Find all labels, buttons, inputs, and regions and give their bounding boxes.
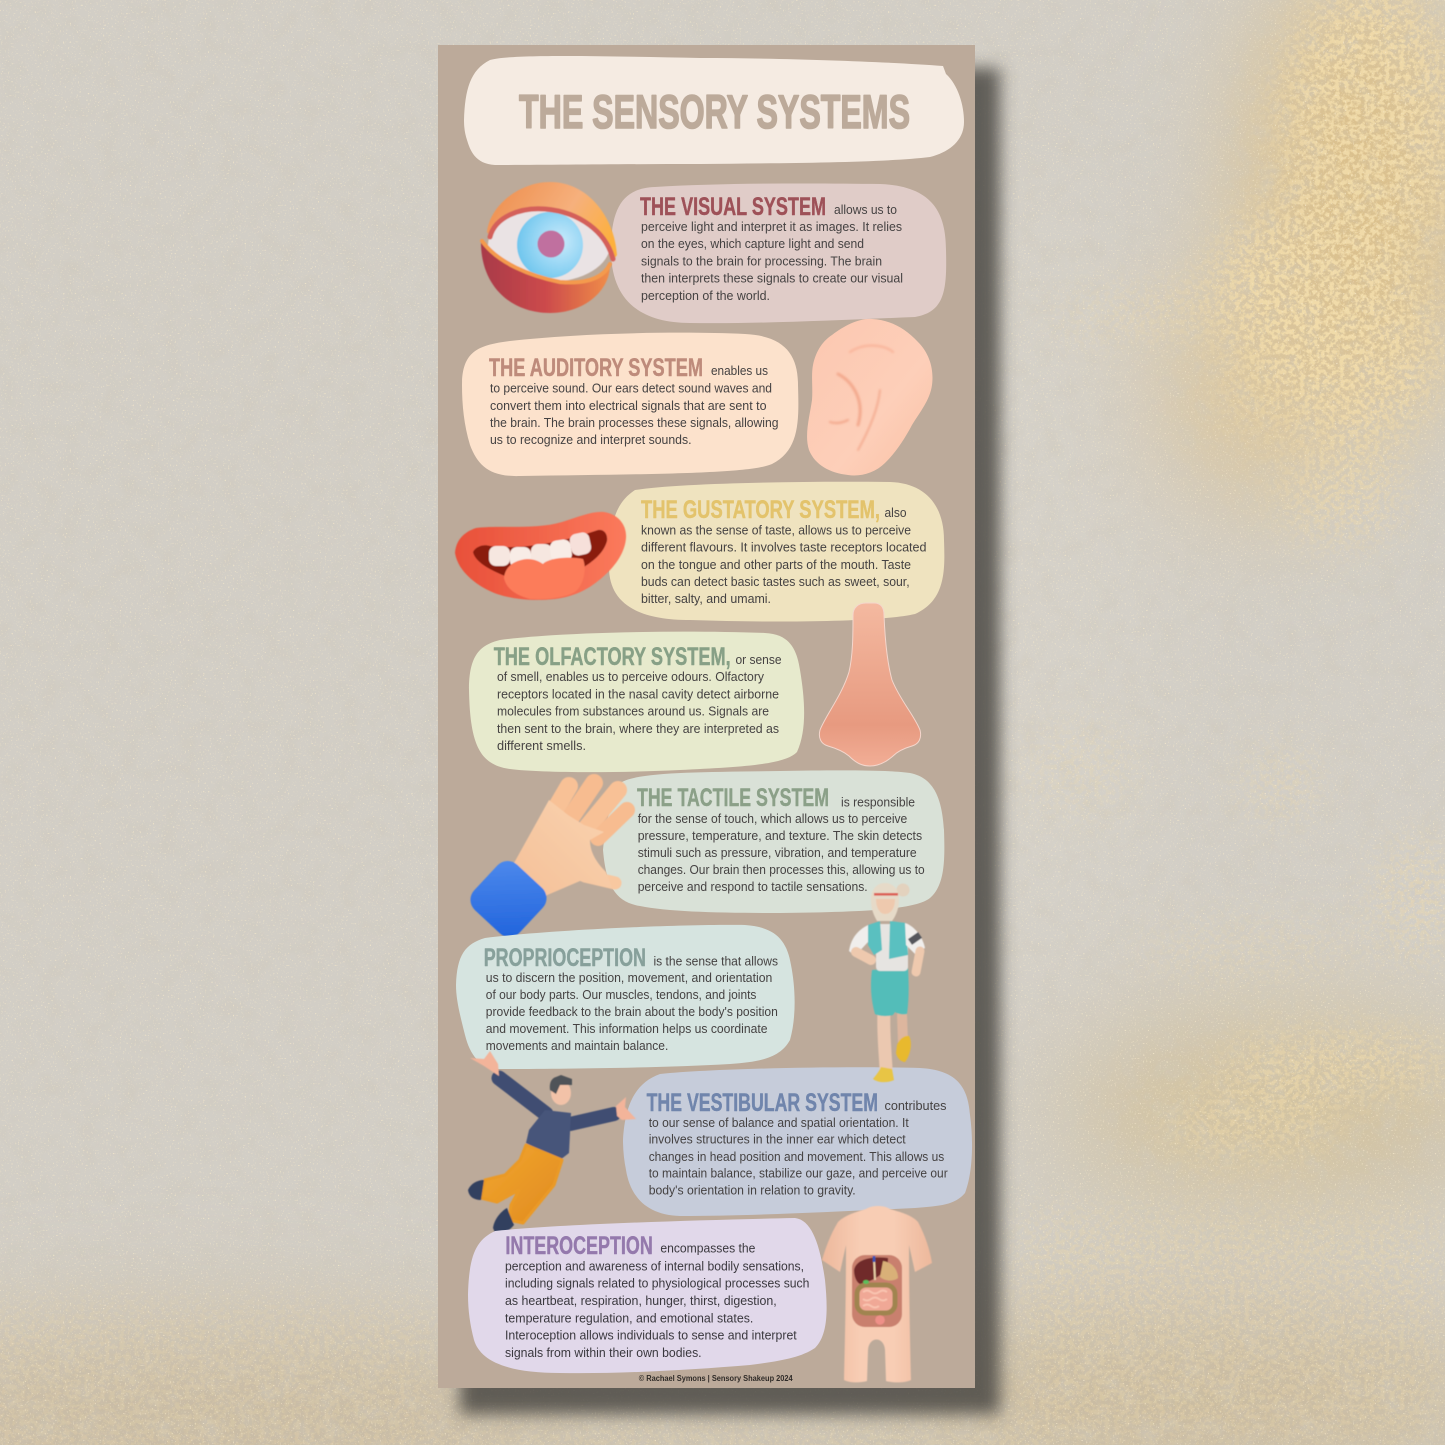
body text: and movement. This information helps us coordinate <box>486 1022 768 1036</box>
body text: us to discern the position, movement, and orientation <box>486 971 772 985</box>
body text: or sense <box>736 653 782 667</box>
body text: convert them into electrical signals that are sent to <box>490 399 766 413</box>
icon: eye <box>481 182 617 313</box>
body text: to maintain balance, stabilize our gaze, and perceive our <box>649 1167 948 1181</box>
body text: perceive light and interpret it as images. It relies <box>641 220 902 234</box>
body text: receptors located in the nasal cavity detect airborne <box>497 688 779 702</box>
body text: different flavours. It involves taste receptors located <box>641 540 926 554</box>
body text <box>490 364 778 447</box>
body text: movements and maintain balance. <box>486 1039 668 1053</box>
body text: Interoception allows individuals to sense and interpret <box>505 1329 797 1343</box>
body text: signals to the brain for processing. The brain <box>641 254 882 268</box>
body text <box>505 1242 809 1360</box>
body text: different smells. <box>497 739 586 753</box>
body text: the brain. The brain processes these signals, allowing <box>490 416 778 430</box>
body text: buds can detect basic tastes such as sweet, sour, <box>641 575 910 589</box>
body text: perceive and respond to tactile sensations. <box>638 880 868 894</box>
body text: enables us <box>711 364 768 378</box>
body text: signals from within their own bodies. <box>505 1346 702 1360</box>
body text: allows us to <box>834 203 897 217</box>
body text: contributes <box>884 1099 946 1113</box>
panel: proprioception <box>456 925 795 1069</box>
body text: bitter, salty, and umami. <box>641 592 771 606</box>
body text: for the sense of touch, which allows us to perceive <box>638 812 907 826</box>
body text: then sent to the brain, where they are interpreted as <box>497 722 779 736</box>
body text: on the tongue and other parts of the mouth. Taste <box>641 558 911 572</box>
body text: to perceive sound. Our ears detect sound waves and <box>490 382 772 396</box>
body text: molecules from substances around us. Signals are <box>497 705 769 719</box>
heading: THE AUDITORY SYSTEM <box>489 354 703 382</box>
body text: of our body parts. Our muscles, tendons, and joints <box>486 988 756 1002</box>
body text: then interprets these signals to create our visual <box>641 272 903 286</box>
heading: THE OLFACTORY SYSTEM, <box>494 643 731 671</box>
body text <box>486 954 778 1053</box>
body text: as heartbeat, respiration, hunger, thirst, digestion, <box>505 1294 777 1308</box>
body text: changes. Our brain then processes this, allowing us to <box>638 863 925 877</box>
heading: THE TACTILE SYSTEM <box>637 784 829 812</box>
copyright credit: © Rachael Symons | Sensory Shakeup 2024 <box>639 1374 793 1383</box>
panel: olfactory system <box>469 632 804 772</box>
body text: is the sense that allows <box>654 954 778 968</box>
main poster panel <box>438 45 975 1388</box>
body text <box>497 653 782 753</box>
body text <box>641 203 903 303</box>
body text: perception of the world. <box>641 289 770 303</box>
heading: THE VESTIBULAR SYSTEM <box>647 1089 878 1117</box>
body text: perception and awareness of internal bodily sensations, <box>505 1259 804 1273</box>
body text: also <box>884 506 906 520</box>
body text: on the eyes, which capture light and send <box>641 237 864 251</box>
panel: tactile system <box>603 770 944 913</box>
icon: ear <box>807 319 932 476</box>
icon: nose <box>819 603 921 766</box>
body text: encompasses the <box>660 1242 755 1256</box>
icon: mouth <box>455 512 626 600</box>
body text <box>641 506 926 606</box>
panel: gustatory system <box>609 482 944 622</box>
heading: INTEROCEPTION <box>505 1232 653 1260</box>
body text: provide feedback to the brain about the body's position <box>486 1005 778 1019</box>
body text: pressure, temperature, and texture. The skin detects <box>638 829 922 843</box>
icon: hand <box>465 783 627 943</box>
icon: floating man <box>468 1051 636 1235</box>
body text: including signals related to physiological processes such <box>505 1277 809 1291</box>
body text: is responsible <box>841 795 915 809</box>
body text: of smell, enables us to perceive odours. Olfactory <box>497 670 765 684</box>
body text: us to recognize and interpret sounds. <box>490 433 692 447</box>
panel: visual system <box>611 183 946 323</box>
heading: THE VISUAL SYSTEM <box>640 193 826 221</box>
panel: interoception <box>468 1218 827 1373</box>
heading: PROPRIOCEPTION <box>484 944 646 972</box>
title: THE SENSORY SYSTEMS <box>519 85 910 138</box>
panel: vestibular system <box>623 1067 972 1216</box>
title banner <box>464 56 964 165</box>
body text <box>649 1099 948 1198</box>
body text <box>638 795 925 894</box>
heading: THE GUSTATORY SYSTEM, <box>641 496 880 524</box>
icon: torso with organs <box>822 1206 932 1382</box>
body text: temperature regulation, and emotional states. <box>505 1311 753 1325</box>
body text: stimuli such as pressure, vibration, and temperature <box>638 846 917 860</box>
body text: changes in head position and movement. This allows us <box>649 1150 944 1164</box>
body text: to our sense of balance and spatial orientation. It <box>649 1116 909 1130</box>
panel drop shadow <box>460 68 1000 1414</box>
icon: running woman <box>849 883 925 1082</box>
body text: known as the sense of taste, allows us to perceive <box>641 524 911 538</box>
body text: involves structures in the inner ear which detect <box>649 1133 906 1147</box>
panel: auditory system <box>462 333 798 476</box>
body text: body's orientation in relation to gravity. <box>649 1184 856 1198</box>
